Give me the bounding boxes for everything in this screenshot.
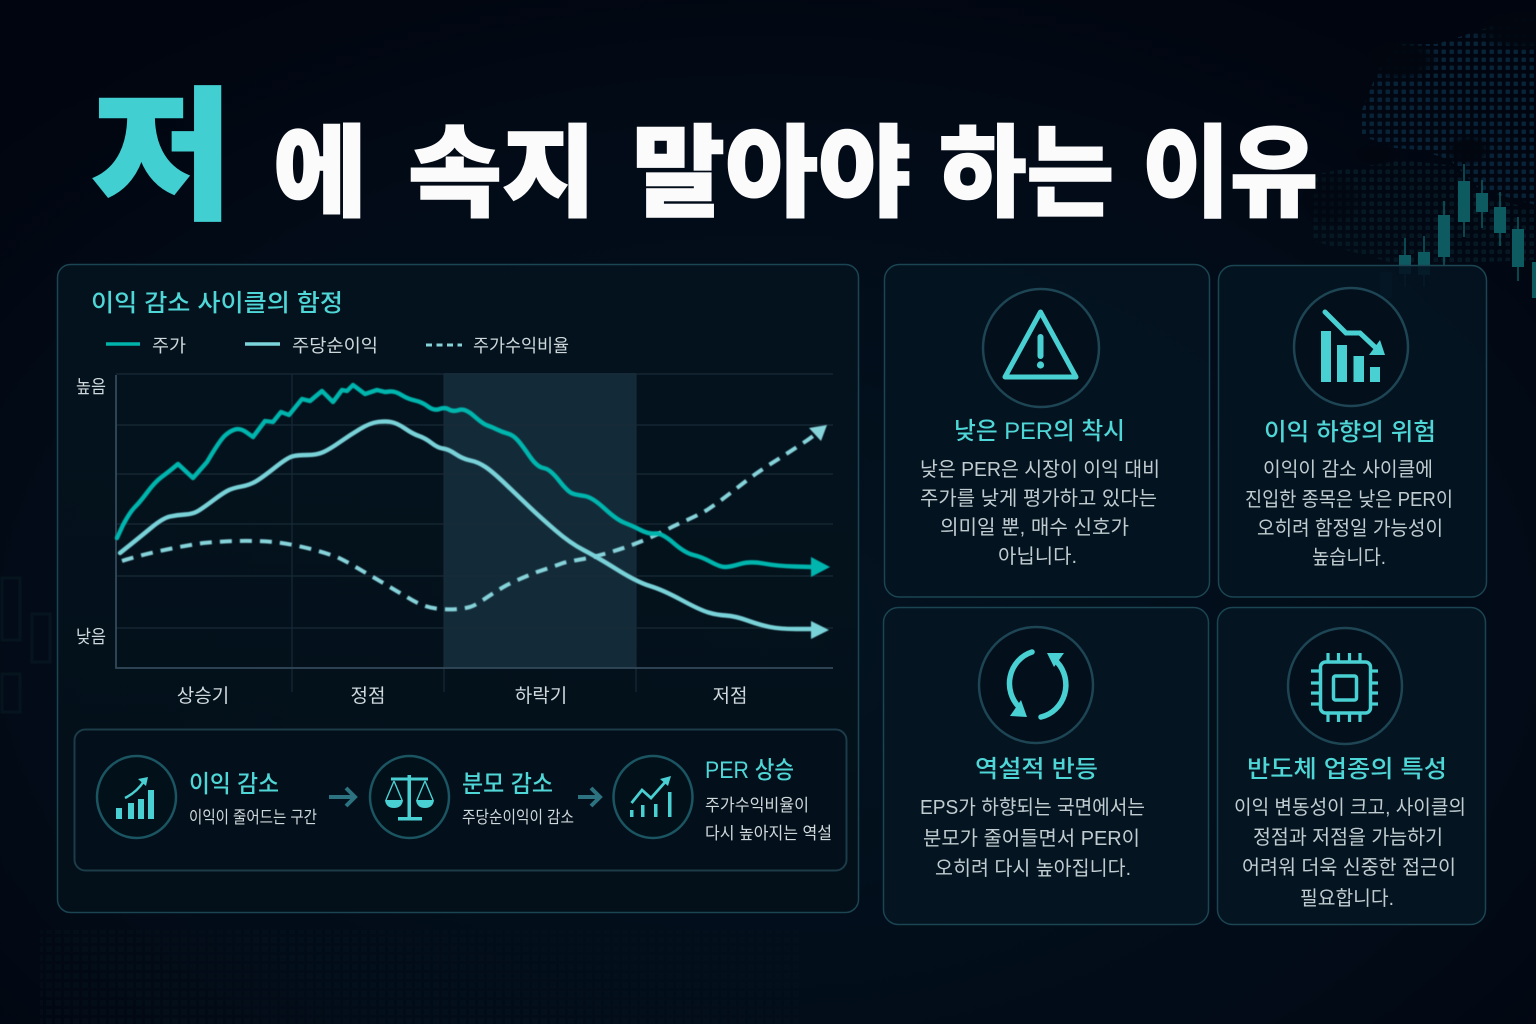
chart title: 이익 감소 사이클의 함정 bbox=[91, 290, 343, 317]
flow step: earnings decline: 이익이 줄어드는 구간 bbox=[189, 808, 317, 827]
card: low PER illusion: 낮은 PER의 착시 bbox=[954, 418, 1125, 445]
line: EPS bbox=[120, 422, 829, 639]
decorative candlesticks right bbox=[1380, 164, 1536, 298]
card: paradoxical rebound: EPS가 하향되는 국면에서는 bbox=[920, 796, 1145, 819]
flow step: earnings decline: 이익 감소 bbox=[189, 771, 279, 798]
flow step: PER rise: 주가수익비율이 bbox=[705, 796, 809, 815]
y axis labels: 낮음 bbox=[76, 627, 106, 647]
title: 에 bbox=[273, 118, 367, 230]
y axis labels bbox=[76, 377, 106, 647]
x axis labels: 하락기 bbox=[515, 685, 567, 707]
flow step: denominator decline bbox=[370, 756, 574, 838]
x axis labels: 상승기 bbox=[177, 685, 229, 707]
decorative candlesticks left bbox=[2, 578, 50, 712]
flow step: earnings decline bbox=[97, 756, 317, 838]
card: semiconductor sector traits: 필요합니다. bbox=[1300, 887, 1394, 910]
card: semiconductor sector traits: 어려워 더욱 신중한 접근이 bbox=[1242, 856, 1456, 879]
legend bbox=[106, 336, 569, 356]
flow step: denominator decline: 주당순이익이 감소 bbox=[462, 808, 574, 827]
icon: warning triangle bbox=[983, 289, 1099, 407]
card: paradoxical rebound bbox=[884, 608, 1208, 924]
icon: falling bars bbox=[1294, 288, 1408, 406]
line: stock price bbox=[117, 385, 830, 577]
panel: flow summary bbox=[74, 730, 846, 870]
arrow bbox=[578, 788, 600, 806]
card: low PER illusion bbox=[884, 264, 1210, 597]
card: paradoxical rebound: 역설적 반등 bbox=[975, 756, 1098, 783]
x axis labels: 정점 bbox=[351, 685, 385, 707]
card: semiconductor sector traits: 이익 변동성이 크고, 사이클의 bbox=[1234, 796, 1466, 819]
card: earnings downturn risk bbox=[1218, 266, 1486, 597]
card: semiconductor sector traits: 반도체 업종의 특성 bbox=[1247, 756, 1447, 783]
icon: chip bbox=[1288, 628, 1402, 744]
chart grid and axes bbox=[116, 374, 833, 692]
card: low PER illusion: 아닙니다. bbox=[998, 545, 1077, 568]
card: paradoxical rebound: 분모가 줄어들면서 PER이 bbox=[923, 827, 1140, 850]
flow step: PER rise: PER 상승 bbox=[705, 757, 794, 784]
card: earnings downturn risk: 높습니다. bbox=[1312, 546, 1386, 569]
title: 하는 bbox=[939, 118, 1114, 230]
title bbox=[91, 79, 1318, 238]
card: earnings downturn risk: 이익이 감소 사이클에 bbox=[1263, 458, 1433, 481]
title: 말아야 bbox=[632, 118, 911, 230]
legend: 주당순이익 bbox=[292, 336, 378, 356]
card: low PER illusion: 의미일 뿐, 매수 신호가 bbox=[940, 516, 1129, 539]
card: low PER illusion: 주가를 낮게 평가하고 있다는 bbox=[920, 487, 1157, 510]
card: earnings downturn risk: 이익 하향의 위험 bbox=[1264, 419, 1436, 446]
y axis labels: 높음 bbox=[76, 377, 106, 397]
legend: 주가 bbox=[152, 336, 186, 356]
card: semiconductor sector traits: 정점과 저점을 가늠하기 bbox=[1253, 826, 1443, 849]
flow step: denominator decline: 분모 감소 bbox=[462, 771, 553, 798]
title: 이유 bbox=[1142, 118, 1318, 230]
highlight band: decline phase bbox=[444, 373, 636, 668]
arrow bbox=[329, 788, 355, 806]
card: paradoxical rebound: 오히려 다시 높아집니다. bbox=[935, 857, 1131, 880]
legend: 주가수익비율 bbox=[473, 336, 569, 356]
card: semiconductor sector traits bbox=[1218, 608, 1486, 924]
panel: earnings cycle chart bbox=[58, 264, 1486, 924]
x axis labels bbox=[177, 685, 747, 707]
title: 속지 bbox=[408, 118, 596, 230]
card: earnings downturn risk: 진입한 종목은 낮은 PER이 bbox=[1245, 488, 1453, 511]
flow step: PER rise: 다시 높아지는 역설 bbox=[705, 824, 832, 843]
title: 저 bbox=[91, 79, 234, 238]
icon: circular arrows bbox=[979, 627, 1093, 743]
flow step: PER rise bbox=[614, 756, 832, 843]
line: PER dashed bbox=[122, 425, 827, 609]
card: low PER illusion: 낮은 PER은 시장이 이익 대비 bbox=[920, 458, 1160, 481]
card: earnings downturn risk: 오히려 함정일 가능성이 bbox=[1257, 517, 1443, 540]
x axis labels: 저점 bbox=[713, 685, 747, 707]
